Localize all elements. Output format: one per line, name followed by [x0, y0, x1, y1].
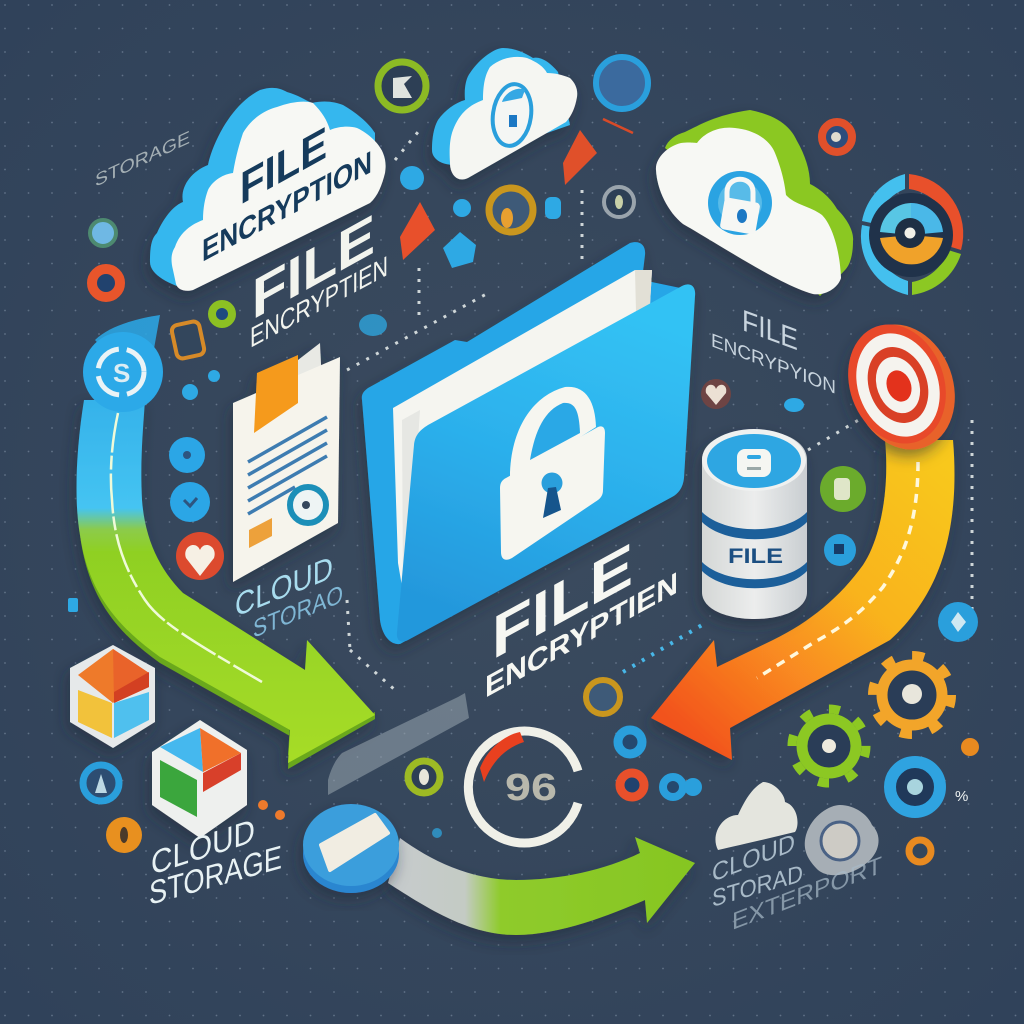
label: cloud storage left: STORAO: [253, 579, 343, 644]
blue accents: [68, 166, 804, 838]
icon: swirl badge on left arrow: S: [113, 358, 130, 388]
folder front: [397, 284, 695, 642]
cloud label: FILE: FILE: [240, 117, 327, 215]
progress ring: [468, 731, 578, 843]
gear: blue: [890, 762, 968, 812]
icon: padlock ring: [708, 171, 772, 235]
barrel: [702, 429, 807, 619]
label: cloud storage bottom: [149, 812, 282, 913]
label: file encryption right: ENCRYPYION: [711, 330, 836, 399]
cloud: file encryption: [150, 88, 386, 291]
blue pill button: [303, 804, 399, 893]
gear: green: [792, 709, 866, 783]
isometric cube: coloured: [152, 720, 247, 838]
cloud label: ENCRYPTION: ENCRYPTION: [202, 144, 372, 269]
label: cloud storage bottom: STORAGE: [149, 839, 282, 913]
folder: [362, 242, 695, 644]
cloud with lock: top right: [656, 110, 853, 296]
arrow: right yellow to orange: [651, 440, 954, 760]
label: cloud storage export: STORAD: [712, 860, 803, 913]
progress ring: 96: [505, 767, 557, 809]
orange arrow tags: [400, 119, 633, 260]
barrel label: FILE: [728, 545, 783, 568]
heading: folder label: ENCRYPTIEN: [485, 565, 678, 705]
cloud with lock: top centre: [432, 48, 577, 180]
label: cloud storage left: CLOUD: [235, 550, 333, 625]
target: coloured dial: [861, 174, 963, 295]
label: file encryption right: FILE: [742, 303, 798, 357]
icon: padlock: [489, 82, 535, 148]
heading: file encryptien: ENCRYPTIEN: [250, 250, 388, 355]
arrow: left blue to green: [77, 400, 375, 769]
faint label: storage: STORAGE: [95, 128, 190, 192]
document with orange tab: [233, 343, 340, 582]
translucent bar: [328, 693, 469, 795]
icon: document seal: [290, 487, 326, 523]
gear: orange: [873, 656, 951, 734]
icon: barrel lock: [737, 449, 771, 477]
icon: swirl badge on left arrow: [83, 315, 163, 412]
heading: folder label: FILE: [492, 529, 633, 673]
target: red bullseye: [832, 310, 972, 464]
label: cloud storage bottom: CLOUD: [151, 812, 255, 883]
arrow: bottom green: [388, 837, 695, 935]
label: cloud storage export: CLOUD: [712, 829, 795, 888]
heart icons: [176, 379, 731, 580]
percent mark: %: [955, 788, 968, 805]
gear: grey: [805, 805, 879, 875]
small cloud: bottom right: [715, 782, 798, 850]
folder papers: [393, 270, 652, 610]
label: cloud storage export: [712, 829, 882, 936]
small icon badges: [83, 57, 979, 862]
folder back: [362, 242, 690, 644]
heading: file encryptien: FILE: [252, 202, 375, 332]
isometric cube: orange: [70, 645, 155, 748]
label: cloud storage export: EXTERPORT: [732, 851, 882, 936]
icon: large padlock: [500, 387, 605, 560]
connector dots: [347, 132, 972, 690]
